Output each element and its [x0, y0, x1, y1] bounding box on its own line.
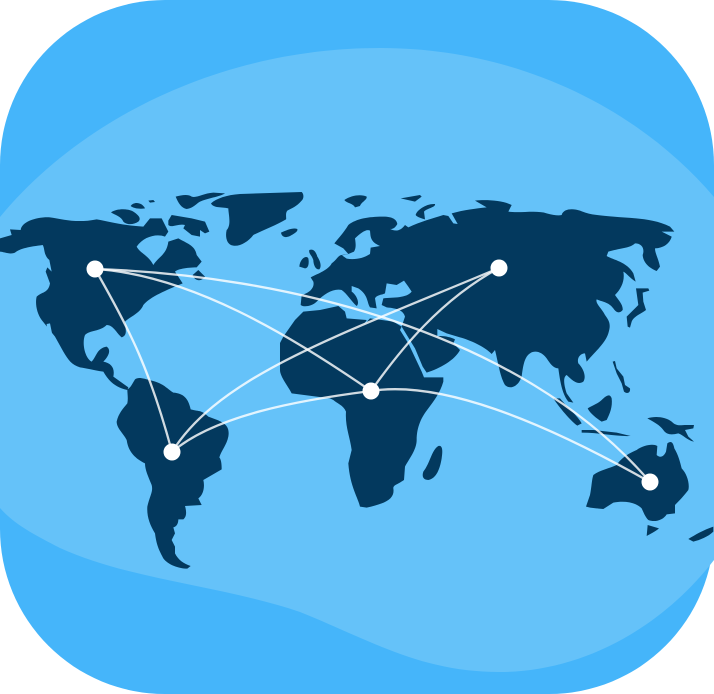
landmass: Eurasia	[299, 195, 674, 403]
network nodes	[86, 260, 658, 490]
connection lines between nodes	[95, 268, 650, 482]
landmass: North America and Arctic	[0, 192, 303, 390]
world map	[0, 192, 713, 569]
landmass: Australia and Oceania	[553, 395, 713, 542]
landmass: South America and Africa	[117, 306, 443, 569]
